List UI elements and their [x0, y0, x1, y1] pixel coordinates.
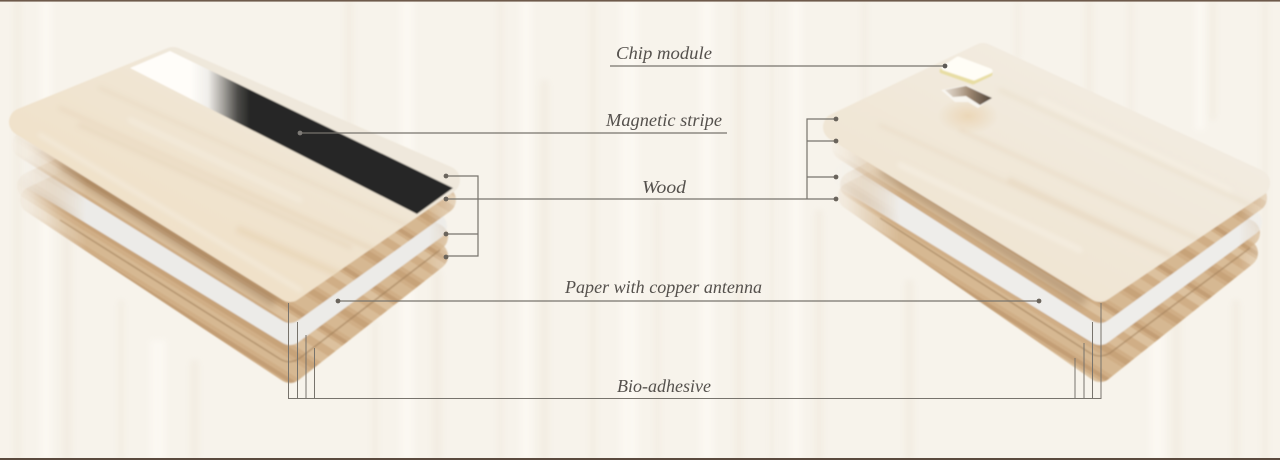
leader: wood	[444, 117, 838, 259]
leader: paper with copper antenna	[336, 299, 1041, 303]
label: chip module: Chip module	[616, 43, 712, 63]
left layer: upper wood	[18, 138, 456, 324]
right layer: upper wood	[834, 145, 1268, 324]
left card grain	[42, 126, 372, 289]
chip module	[942, 59, 990, 82]
leader: magnetic stripe	[298, 131, 727, 135]
label: wood: Wood	[642, 177, 687, 197]
left separation between lower wood layers	[60, 220, 440, 362]
right shadow under top face	[880, 170, 1085, 302]
leader lines and dots	[288, 64, 1101, 398]
right layer: top wood face	[837, 57, 1256, 288]
left layer: paper with copper antenna	[34, 160, 447, 346]
left card stack (magnetic stripe side)	[23, 51, 453, 369]
leader: bio-adhesive	[288, 303, 1101, 398]
label: bio-adhesive: Bio-adhesive	[617, 376, 711, 396]
right layer: bottom wood	[852, 130, 1244, 368]
chip cavity	[941, 85, 992, 108]
glow below chip cavity	[944, 103, 992, 130]
right layer: paper with copper antenna	[847, 164, 1260, 346]
right layer: lower wood	[840, 164, 1261, 250]
left layer: bottom wood	[34, 135, 434, 369]
leader: chip module	[610, 64, 947, 68]
top border	[0, 0, 1280, 2]
magnetic stripe	[130, 51, 453, 214]
left shadow under top face	[60, 165, 275, 303]
right separation between lower wood layers	[880, 218, 1250, 356]
right card stack (chip side)	[837, 57, 1256, 368]
left layer: top wood face	[23, 61, 446, 290]
left layer: lower wood	[19, 160, 449, 252]
bottom border	[0, 458, 1280, 460]
right card grain	[944, 103, 1197, 258]
label: magnetic stripe: Magnetic stripe	[605, 110, 722, 130]
label: paper with copper antenna: Paper with copper antenna	[564, 277, 762, 297]
